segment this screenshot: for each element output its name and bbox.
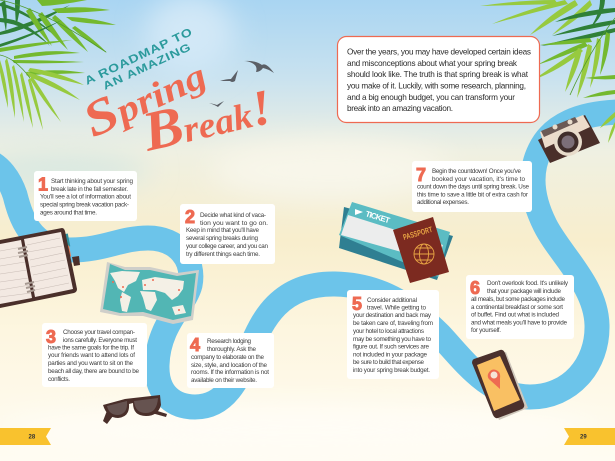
step 4 card: Research lodging (207, 338, 251, 345)
step 5 card: be sure to build that expense (353, 359, 424, 366)
step 5 card: travel. While getting to (367, 304, 426, 312)
step 1 card: break late in the fall semester. (51, 186, 128, 193)
step 2 card: tion you want to go on. (200, 220, 268, 227)
step 3 card: Choose your travel compan- (63, 329, 135, 336)
title word: Break!: Break! (136, 74, 278, 164)
icon: sunglasses (103, 395, 167, 424)
step 3 card: ions carefully. Everyone must (63, 337, 137, 344)
step 4 card: 4 (190, 335, 200, 355)
step 6 card: 6 (470, 278, 480, 298)
title line: AN AMAZING: AN AMAZING (101, 41, 193, 93)
icon: smartphone with map pin (472, 350, 528, 420)
step 5 card: into your spring break budget. (353, 367, 430, 374)
step 4 card: size, style, and location of the (191, 362, 267, 369)
step 3 card (42, 323, 147, 387)
step 6 card: all meals, but some packages include (471, 296, 565, 303)
palm fronds: top right (480, 0, 615, 143)
step 5 card: 5 (352, 294, 362, 314)
step 5 card: Consider additional (367, 297, 417, 304)
step 5 card: your hotel to local attractions (353, 328, 424, 335)
step 3 card: conflicts. (48, 376, 70, 383)
step 4 card: available on their website. (191, 377, 257, 384)
step 3 card: parties and you want to sit on the (48, 360, 133, 367)
intro callout: and a big enough budget, you can transform your (347, 93, 515, 102)
icon: camera (538, 115, 600, 163)
icon: passport (393, 217, 449, 283)
step 7 card: count down the days until spring break. Use (417, 184, 529, 190)
step 2 card: several spring breaks during (186, 235, 258, 242)
step 6 card: Don't overlook food. It's unlikely (487, 280, 569, 287)
page number ribbon: 29 (564, 428, 615, 445)
intro callout: Over the years, you may have developed certain ideas (347, 48, 531, 56)
step 4 card: company to elaborate on the (191, 354, 264, 361)
intro callout (338, 36, 540, 122)
step 2 card: Keep in mind that you'll have (186, 227, 259, 234)
icon: world map (100, 262, 199, 324)
ticket label: TICKET (364, 209, 391, 225)
step 4 card: thoroughly. Ask the (207, 346, 256, 353)
icon: seagulls (209, 61, 274, 107)
page number ribbon: 29: 29 (580, 434, 587, 440)
intro callout: break into an amazing vacation. (347, 104, 453, 113)
step 3 card: your friends want to attend lots of (48, 352, 135, 359)
step 5 card: may be something you have to (353, 336, 431, 343)
step 6 card: a continental breakfast or some sort (471, 304, 563, 311)
intro callout: you make of it. Luckily, with some research, planning, (347, 82, 526, 90)
step 1 card: Start thinking about your spring (51, 178, 133, 185)
title line: A ROADMAP TO: A ROADMAP TO (83, 26, 195, 88)
step 1 card: 1 (38, 174, 48, 194)
step 5 card: be taken care of, traveling from (353, 320, 433, 327)
step 5 card: figure out. If such services are (353, 344, 429, 350)
step 2 card: try different things each time. (186, 251, 260, 258)
step 1 card: special spring break vacation pack- (40, 202, 129, 208)
title word: Spring: Spring (74, 43, 214, 148)
intro callout: should look like. The truth is that spring break is what (347, 70, 529, 79)
icon: plane tickets (339, 202, 453, 280)
step 4 card (187, 333, 274, 388)
step 1 card: ages around that time. (40, 210, 97, 216)
step 7 card (412, 161, 532, 212)
winding blue road (0, 112, 615, 407)
step 5 card: not included in your package (353, 352, 427, 358)
step 1 card: You'll see a lot of information about (40, 194, 131, 200)
page number ribbon: 28: 28 (28, 434, 36, 440)
step 6 card: and what meals you'll have to provide (471, 320, 567, 326)
step 2 card: your college career, and you can (186, 243, 268, 250)
step 6 card: that your package will include (487, 288, 561, 295)
step 3 card: beach all day, there are bound to be (48, 368, 139, 375)
palm fronds: top left (0, 0, 116, 130)
title (74, 26, 278, 164)
step 4 card: rooms. If the information is not (191, 369, 269, 376)
step 1 card (34, 171, 137, 221)
page number ribbon: 28 (0, 428, 51, 445)
step 5 card: your destination and back may (353, 312, 432, 319)
step 3 card: have the same goals for the trip. If (48, 344, 134, 352)
step 6 card: of buffet. Find out what is included (471, 312, 559, 318)
step 2 card: 2 (185, 207, 195, 227)
step 6 card (466, 275, 574, 339)
step 7 card: Begin the countdown! Once you've (432, 168, 521, 175)
intro callout: and misconceptions about what your spring break (347, 59, 518, 68)
step 2 card (180, 204, 275, 264)
icon: notebook (0, 228, 80, 309)
step 3 card: 3 (46, 327, 56, 347)
step 5 card (347, 290, 439, 379)
step 7 card: this time to save a little bit of extra cash for (417, 192, 528, 198)
step 7 card: additional expenses. (417, 199, 469, 206)
step 6 card: for yourself. (471, 327, 501, 334)
step 7 card: 7 (416, 165, 426, 185)
passport label: PASSPORT (402, 225, 433, 242)
step 7 card: booked your vacation, it's time to (432, 176, 525, 183)
step 2 card: Decide what kind of vaca- (200, 212, 266, 219)
